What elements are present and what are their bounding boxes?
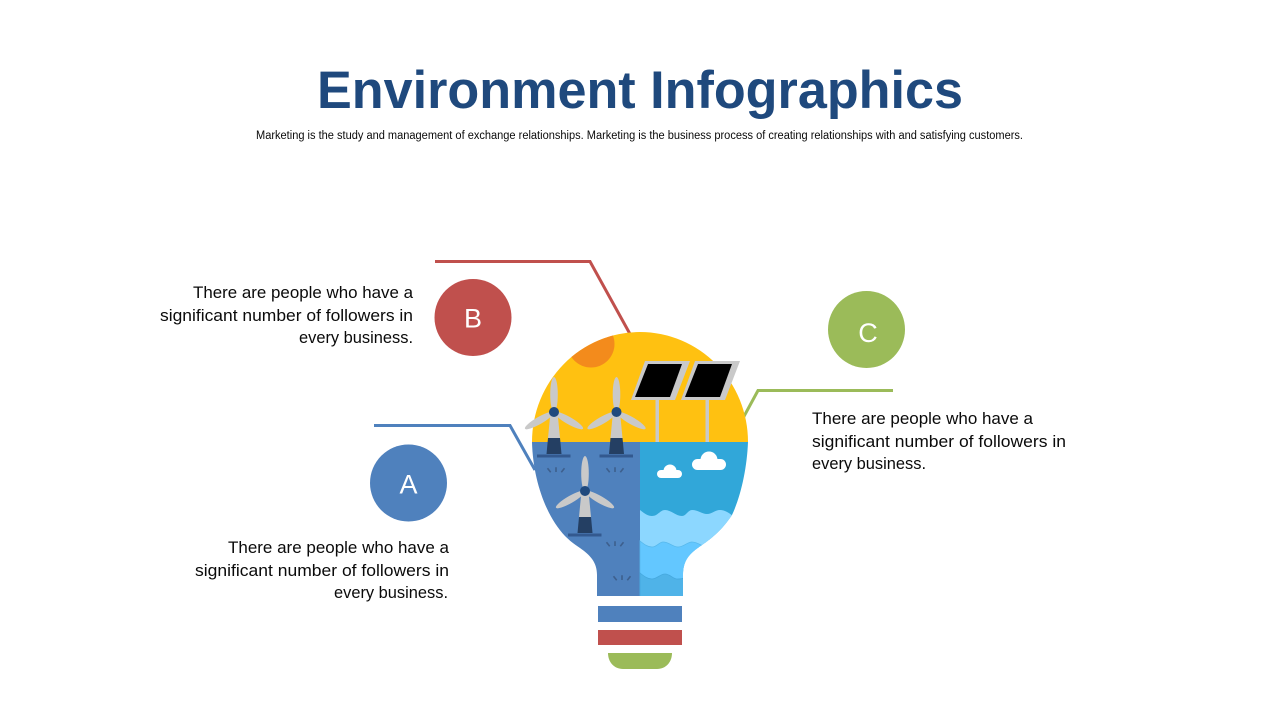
- text block B: significant number of followers in: [160, 307, 413, 325]
- leader line C: [742, 390, 893, 420]
- base bar red: [598, 630, 682, 645]
- badge B: [434, 279, 512, 356]
- light bulb: [523, 320, 760, 669]
- solar panel 1: [631, 361, 690, 442]
- badge A: A: [399, 470, 418, 500]
- leader line B: [435, 262, 630, 334]
- wind turbine 3: [554, 456, 616, 536]
- text block C: There are people who have a: [812, 410, 1034, 428]
- text block C: every business.: [812, 455, 926, 473]
- wind turbine 2: [586, 377, 647, 458]
- text block B: every business.: [299, 329, 413, 347]
- text block A: significant number of followers in: [195, 562, 449, 580]
- grass ticks: [548, 467, 630, 580]
- leader line A: [374, 426, 535, 470]
- text block C: significant number of followers in: [812, 433, 1066, 451]
- text block A: There are people who have a: [228, 539, 450, 557]
- badge A: [370, 444, 447, 522]
- wind turbine 1: [523, 377, 585, 458]
- badge C: C: [858, 318, 878, 348]
- text block B: There are people who have a: [193, 284, 414, 302]
- bulb fill regions: [532, 332, 748, 596]
- title: Environment Infographics: [317, 61, 963, 120]
- text block C: [812, 410, 1066, 473]
- text block A: [195, 539, 450, 602]
- cloud large: [692, 452, 726, 470]
- subtitle: Marketing is the study and management of exchange relationships. Marketing is the business process of creating relationships with and satisfying customers.: [256, 130, 1023, 142]
- base bar blue: [598, 606, 682, 622]
- badge B: B: [464, 304, 482, 334]
- text block B: [160, 284, 414, 347]
- base cap green: [608, 653, 672, 669]
- badge C: [828, 291, 905, 368]
- text block A: every business.: [334, 584, 448, 602]
- cloud small: [657, 464, 682, 478]
- solar panel 2: [681, 361, 740, 442]
